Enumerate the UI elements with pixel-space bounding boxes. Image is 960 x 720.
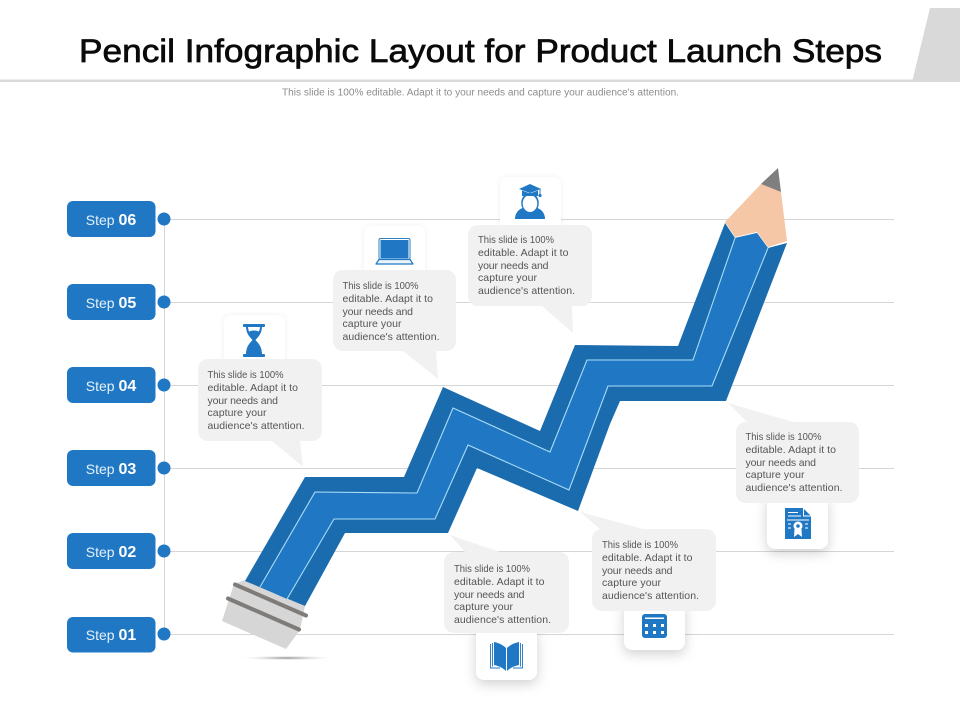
icon: certificate [785, 508, 812, 539]
header corner accent [912, 8, 960, 82]
step 01: Step 01 [86, 627, 136, 644]
icon: calculator [642, 614, 667, 638]
callout: calculator [580, 512, 716, 650]
icon card [224, 315, 285, 375]
callout text: your needs and [746, 457, 816, 469]
speech bubble [333, 270, 456, 379]
callout text [746, 431, 842, 494]
pencil [222, 168, 787, 660]
speech bubble [468, 225, 592, 333]
callout text: audience's attention. [746, 482, 842, 494]
icon card [767, 495, 828, 549]
callout text: This slide is 100% [746, 431, 822, 443]
callout text: editable. Adapt it to [454, 576, 545, 588]
step 04: Step 04 [86, 378, 136, 395]
header rule [0, 80, 914, 82]
icon: graduate [515, 184, 545, 219]
icon: book [490, 642, 522, 671]
step 05: Step 05 [86, 295, 136, 312]
step 02 [67, 533, 170, 569]
callout text: your needs and [602, 565, 673, 577]
callout text: editable. Adapt it to [746, 444, 836, 456]
callout text: editable. Adapt it to [342, 293, 433, 305]
callout text: editable. Adapt it to [602, 552, 693, 564]
step 03: Step 03 [86, 461, 136, 478]
eraser bands [228, 584, 306, 630]
step 06 [67, 201, 170, 237]
pencil body outer [245, 223, 787, 606]
step 01 [67, 617, 170, 652]
title: Pencil Infographic Layout for Product Launch Steps [79, 33, 882, 69]
callout text: capture your [342, 318, 402, 330]
callout: laptop [333, 226, 456, 379]
icon card [624, 600, 685, 650]
icon card [476, 625, 537, 680]
step 03 [67, 450, 170, 486]
icon: laptop [376, 238, 413, 264]
callout text: This slide is 100% [208, 369, 284, 381]
callout text [208, 369, 304, 432]
callout text [454, 563, 551, 626]
icon card [500, 177, 561, 237]
subtitle: This slide is 100% editable. Adapt it to your needs and capture your audience's attention. [282, 88, 679, 98]
callout text: your needs and [454, 589, 525, 601]
callout text: capture your [746, 469, 805, 481]
callout text: audience's attention. [208, 420, 304, 432]
speech bubble [728, 403, 859, 503]
pencil stripes [260, 238, 768, 599]
pencil wood tip [725, 184, 787, 247]
callout text: audience's attention. [602, 590, 699, 602]
callout text: capture your [478, 272, 538, 284]
callout text [602, 539, 699, 602]
step 02: Step 02 [86, 544, 136, 561]
pencil shadow [237, 656, 337, 660]
callout text: This slide is 100% [342, 280, 418, 292]
step 04 [67, 367, 170, 403]
speech bubble [580, 512, 716, 611]
callout text: capture your [454, 601, 514, 613]
callout: book [444, 535, 569, 680]
callout: hourglass [198, 315, 322, 467]
icon: hourglass [243, 324, 265, 357]
speech bubble [198, 359, 322, 467]
step 05 [67, 284, 170, 320]
callout text: capture your [208, 407, 267, 419]
callout text [478, 234, 575, 297]
callout text: This slide is 100% [602, 539, 678, 551]
callout text: your needs and [342, 306, 413, 318]
callout text: your needs and [478, 260, 549, 272]
callout: graduate [468, 177, 592, 333]
callout text: capture your [602, 577, 662, 589]
callout text: This slide is 100% [478, 234, 554, 246]
step labels [67, 201, 170, 652]
pencil body centre [260, 233, 768, 599]
callout text: editable. Adapt it to [208, 382, 298, 394]
callout text [342, 280, 440, 343]
callout text: audience's attention. [342, 331, 440, 343]
callout text: editable. Adapt it to [478, 247, 569, 259]
icon card [364, 226, 425, 286]
pencil lead [761, 168, 781, 192]
pencil eraser [222, 580, 305, 649]
step 06: Step 06 [86, 212, 136, 229]
callout text: audience's attention. [478, 285, 575, 297]
speech bubble [444, 535, 569, 633]
callout text: your needs and [208, 395, 278, 407]
callout text: audience's attention. [454, 614, 551, 626]
callout: certificate [728, 403, 859, 549]
callout text: This slide is 100% [454, 563, 530, 575]
